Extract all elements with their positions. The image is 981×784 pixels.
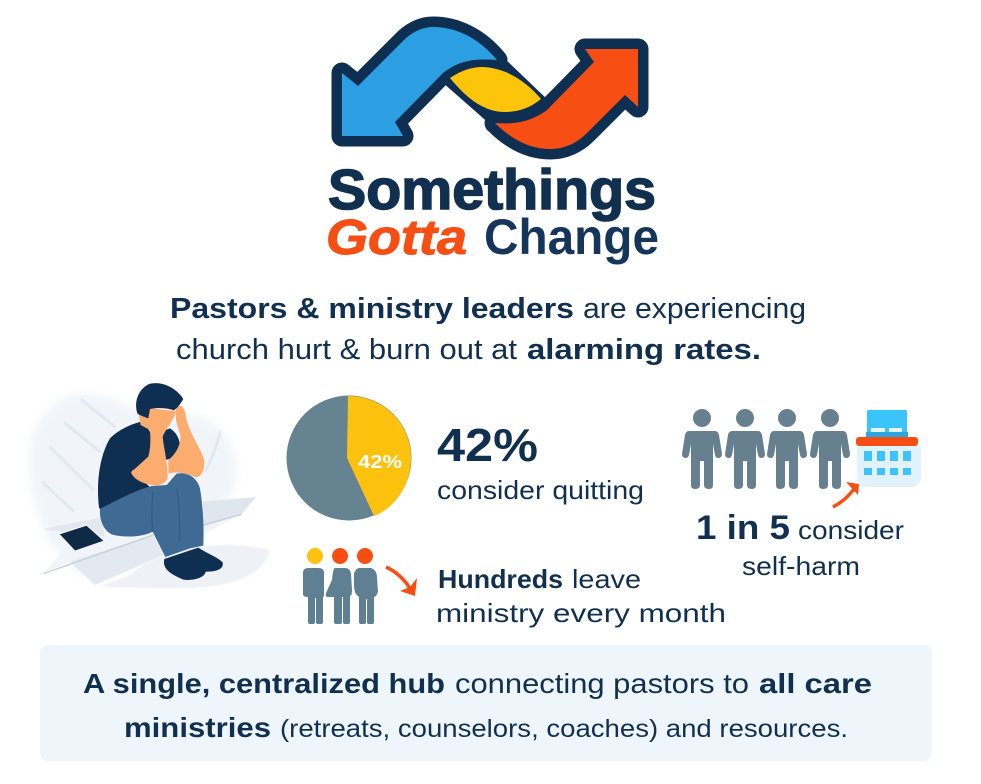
arrow: leaving, down-right <box>386 567 417 596</box>
callout line 1: connecting pastors to <box>455 668 749 699</box>
jeans <box>100 473 204 557</box>
headline text <box>170 293 806 366</box>
stat: hundreds leave ministry: leave <box>572 564 641 594</box>
torso <box>98 421 180 509</box>
callout line 1: A single, centralized hub <box>83 668 445 699</box>
panel: centralized hub callout <box>40 645 932 761</box>
stat: 42% consider quitting <box>437 419 644 505</box>
wall streaks <box>43 400 220 511</box>
stat: hundreds leave ministry: ministry every month <box>436 598 726 628</box>
stat: 1 in 5 consider self-harm: 1 in 5 <box>696 509 790 547</box>
stat: 1 in 5 consider self-harm: self-harm <box>742 551 860 581</box>
hair <box>136 383 183 418</box>
headline text: are experiencing <box>583 293 806 325</box>
stat: 1 in 5 consider self-harm <box>696 509 904 581</box>
pie label: 42% <box>358 452 402 472</box>
stat: 42% consider quitting: 42% <box>437 419 538 471</box>
shoes <box>164 548 223 580</box>
stat: hundreds leave ministry <box>436 564 726 628</box>
icon: calendar <box>856 410 921 487</box>
logo wordmark <box>326 158 659 265</box>
arrow: blue down-left <box>342 27 497 136</box>
stat: 1 in 5 consider self-harm: consider <box>798 515 904 545</box>
callout line 2: ministries <box>124 712 271 743</box>
icon: four people <box>682 409 850 489</box>
pie slice: yellow 42% <box>347 396 411 516</box>
shape: yellow centre leaf <box>450 67 541 112</box>
tablet <box>59 525 105 551</box>
shape: navy band behind the crossing <box>442 33 549 133</box>
background haze <box>30 393 236 575</box>
floor shadow <box>100 545 270 588</box>
arms and hands <box>168 406 204 477</box>
pie chart: 42% <box>286 396 412 520</box>
logo: crossing arrows <box>342 27 638 149</box>
callout line 2 <box>124 712 848 743</box>
callout line 1: all care <box>759 668 872 699</box>
wordmark: Change: Change <box>484 209 659 265</box>
arrow: orange up-right <box>495 49 638 149</box>
callout line 1 <box>83 668 872 699</box>
bench <box>43 497 256 585</box>
icon: three people leaving <box>303 548 378 624</box>
headline text: church hurt & burn out at <box>176 334 517 366</box>
arrow: to calendar <box>833 482 859 507</box>
wordmark: Somethings: Somethings <box>328 158 656 222</box>
stat: hundreds leave ministry: Hundreds <box>438 564 563 594</box>
headline text: alarming rates. <box>527 334 761 366</box>
headline text: Pastors & ministry leaders <box>170 293 574 325</box>
illustration: distressed pastor sitting with head in hands <box>30 383 270 588</box>
stat: 42% consider quitting: consider quitting <box>437 475 644 505</box>
callout line 2: (retreats, counselors, coaches) and resources. <box>280 715 848 743</box>
wordmark: Gotta: Gotta <box>326 211 467 265</box>
